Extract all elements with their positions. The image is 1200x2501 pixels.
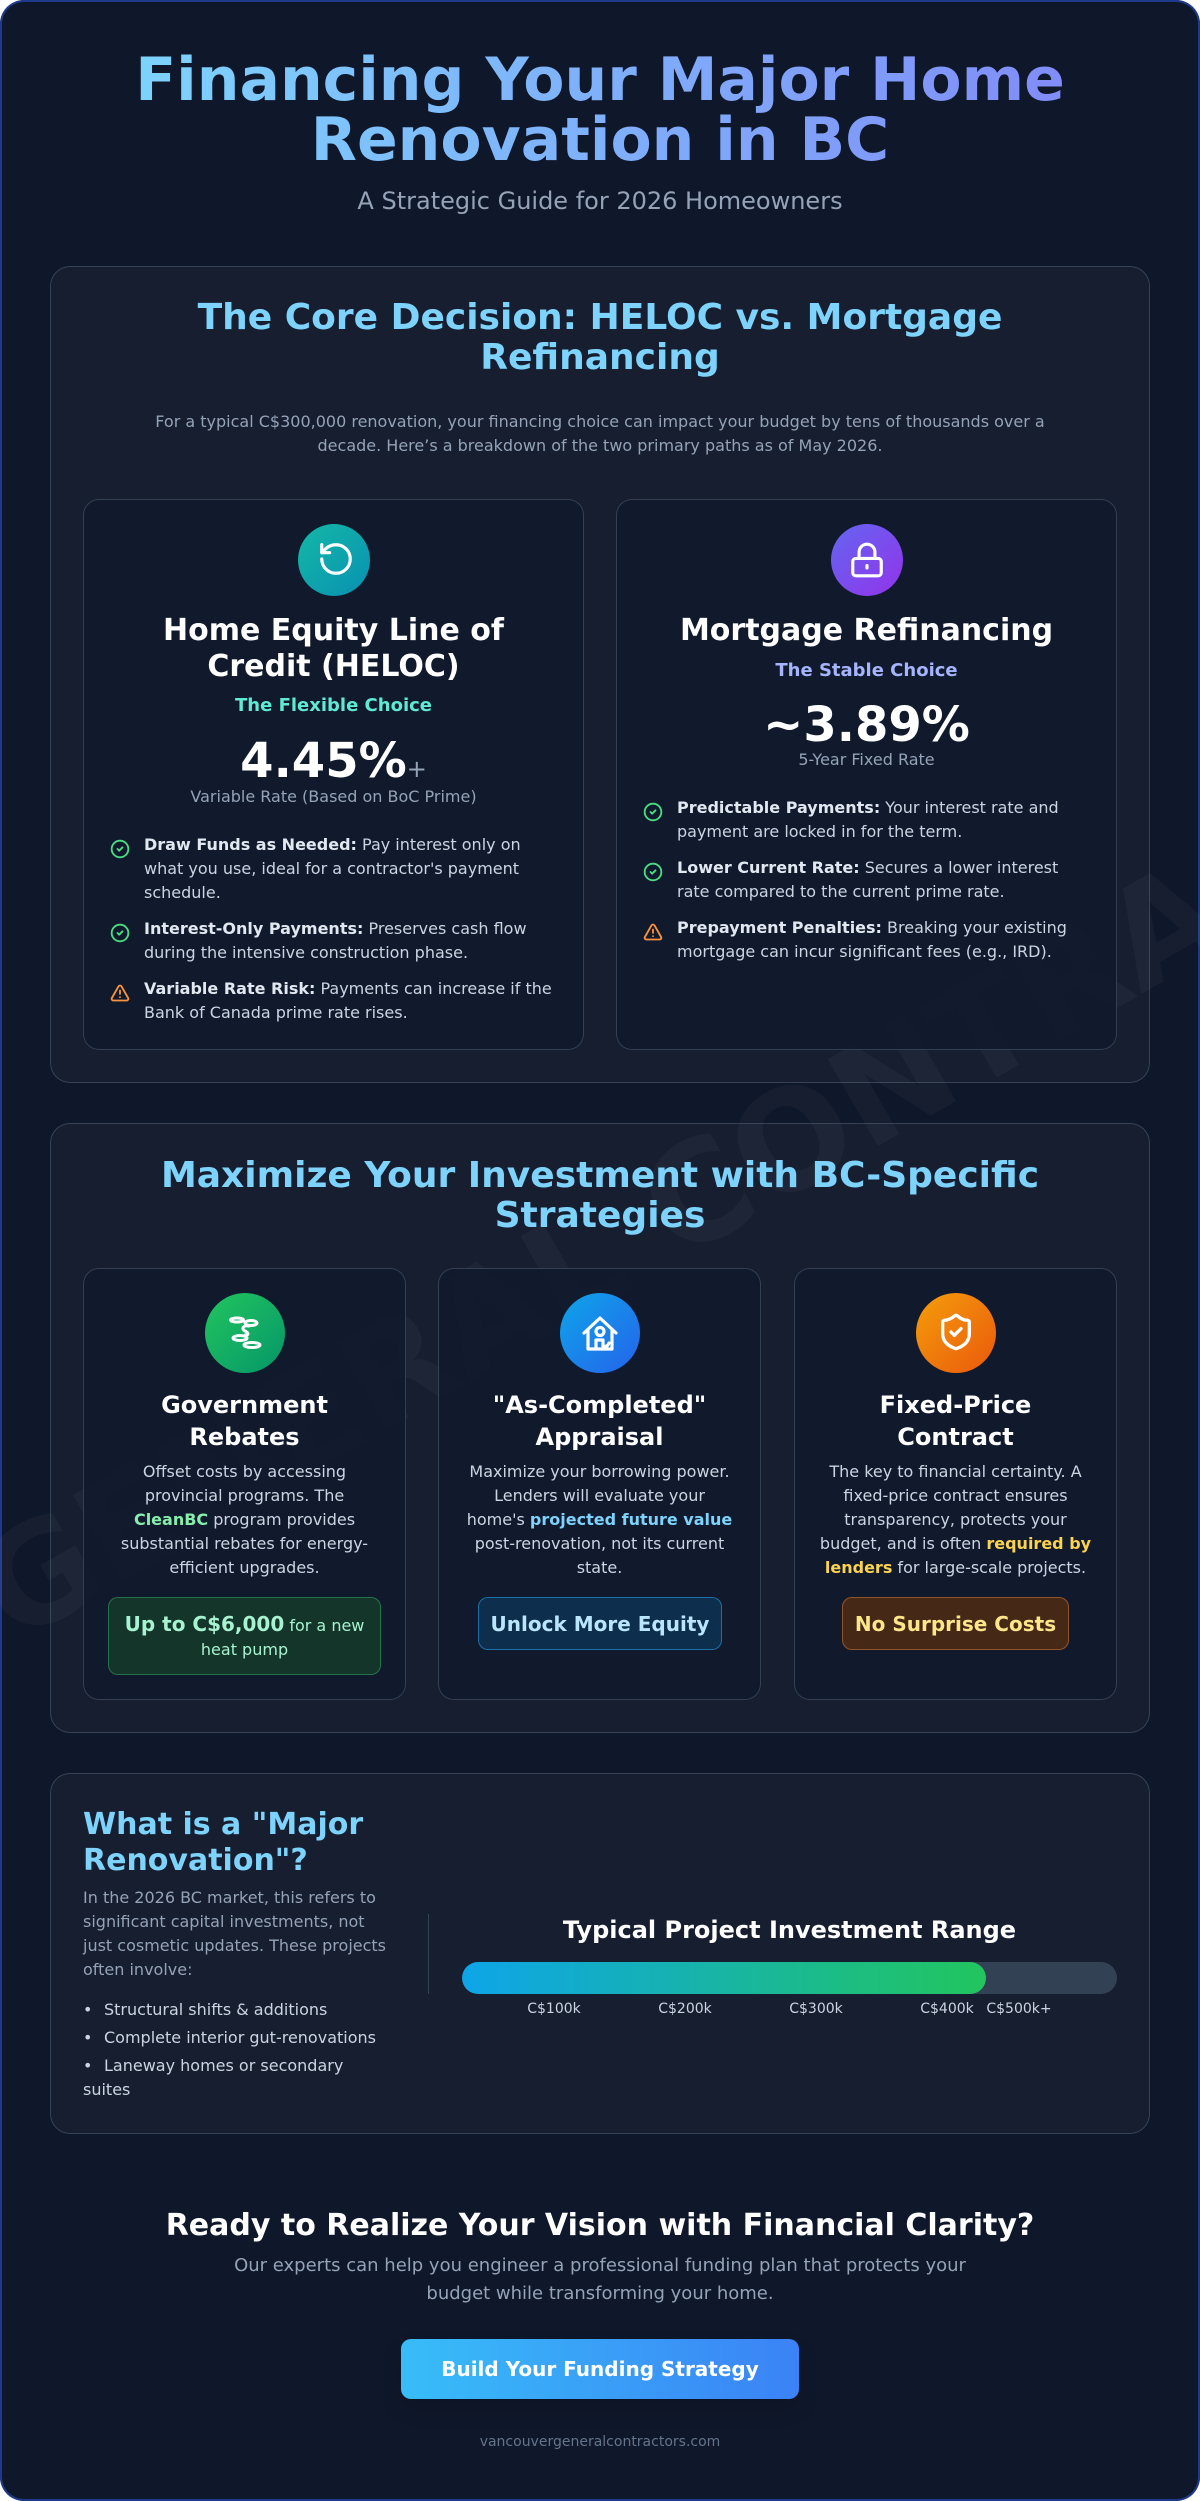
item: variable risk — [110, 979, 552, 1022]
callout: heat pump — [201, 1640, 288, 1659]
card text: Offset costs by accessing — [143, 1462, 346, 1481]
chart: investment range: C$500k+ — [986, 2001, 1052, 2017]
card text — [121, 1462, 368, 1577]
item: prepayment — [644, 918, 1067, 961]
card: fixed price — [794, 1268, 1117, 1700]
item: draw funds — [110, 835, 521, 902]
chart title: Typical Project Investment Range — [563, 1916, 1016, 1944]
cta text: budget while transforming your home. — [426, 2283, 774, 2304]
rate label: Variable Rate (Based on BoC Prime) — [190, 787, 477, 806]
item: lower rate: Lower Current Rate: Secures a lower interest — [677, 858, 1058, 877]
card text: state. — [577, 1558, 622, 1577]
callout — [842, 1597, 1069, 1650]
item: draw funds: Draw Funds as Needed: Pay interest only on — [144, 835, 521, 854]
panel: major renovation — [50, 1773, 1150, 2134]
card: appraisal — [438, 1268, 761, 1700]
callout: No Surprise Costs — [855, 1612, 1056, 1636]
card text — [820, 1462, 1091, 1577]
chart: investment range: C$200k — [658, 2001, 712, 2017]
card title: Government — [161, 1391, 328, 1419]
item: interest only: Interest-Only Payments: Preserves cash flow — [144, 919, 527, 938]
title — [130, 50, 1070, 170]
project list: Laneway homes or secondary — [104, 2056, 343, 2075]
range bar — [462, 1962, 1117, 1994]
card title: Mortgage Refinancing — [680, 613, 1053, 648]
chart: investment range: C$400k — [920, 2001, 974, 2017]
title: Renovation in BC — [311, 105, 889, 175]
item: draw funds: what you use, ideal for a contractor's payment — [144, 859, 519, 878]
card: HELOC — [83, 499, 584, 1050]
axis labels: C$100k — [527, 2001, 581, 2017]
card text: transparency, protects your — [844, 1510, 1067, 1529]
card text — [467, 1462, 732, 1577]
icon: lock — [830, 524, 902, 596]
card text: The key to financial certainty. A — [829, 1462, 1082, 1481]
tagline: The Flexible Choice — [235, 695, 432, 716]
tagline: The Stable Choice — [775, 660, 958, 681]
item: prepayment: mortgage can incur significant fees (e.g., IRD). — [677, 942, 1052, 961]
heading: core decision — [198, 297, 1002, 378]
card text: budget, and is often required by — [820, 1534, 1091, 1553]
card title: "As-Completed" — [493, 1391, 706, 1419]
rate: ~3.89% — [763, 697, 970, 753]
card title: Credit (HELOC) — [207, 649, 460, 684]
subtitle: A Strategic Guide for 2026 Homeowners — [357, 187, 843, 215]
footer url: vancouvergeneralcontractors.com — [480, 2434, 720, 2450]
project list: • — [83, 2028, 92, 2047]
item: predictable — [644, 798, 1059, 841]
item: interest only: during the intensive construction phase. — [144, 943, 468, 962]
project list: • — [83, 2056, 92, 2075]
project list: Structural shifts & additions — [104, 2000, 327, 2019]
project list: Complete interior gut-renovations — [104, 2028, 376, 2047]
cta button — [401, 2339, 799, 2399]
icon: rotate arrow — [298, 524, 370, 596]
panel: BC strategies — [50, 1123, 1150, 1733]
definition text: significant capital investments, not — [83, 1912, 365, 1931]
card text: provincial programs. The — [145, 1486, 344, 1505]
callout: Unlock More Equity — [491, 1612, 709, 1636]
card text: Maximize your borrowing power. — [469, 1462, 730, 1481]
intro text: decade. Here’s a breakdown of the two primary paths as of May 2026. — [318, 436, 882, 455]
card text: fixed-price contract ensures — [843, 1486, 1068, 1505]
card: mortgage — [616, 499, 1117, 1050]
cta button: Build Your Funding Strategy — [441, 2357, 759, 2381]
card title: Contract — [897, 1423, 1014, 1451]
chart: investment range — [462, 1916, 1117, 2017]
item: prepayment: Prepayment Penalties: Breaking your existing — [677, 918, 1067, 937]
cta text — [234, 2255, 966, 2304]
card title: Fixed-Price — [880, 1391, 1031, 1419]
heading: strategies: Maximize Your Investment with BC-Specific — [161, 1155, 1039, 1196]
item: interest only — [110, 919, 527, 962]
callout: Up to C$6,000 for a new — [125, 1612, 364, 1636]
card title: Home Equity Line of — [163, 613, 504, 648]
project list — [83, 2000, 376, 2099]
item: draw funds: schedule. — [144, 883, 221, 902]
intro text: For a typical C$300,000 renovation, your financing choice can impact your budget by tens of thousands over a — [155, 412, 1045, 431]
heading: core decision: Refinancing — [480, 337, 720, 378]
item: variable risk: Bank of Canada prime rate rises. — [144, 1003, 408, 1022]
card text: CleanBC program provides — [134, 1510, 355, 1529]
card text: efficient upgrades. — [169, 1558, 320, 1577]
heading: major renovation — [83, 1807, 364, 1878]
card title: Rebates — [189, 1423, 300, 1451]
callout — [108, 1597, 381, 1675]
card text: lenders for large-scale projects. — [825, 1558, 1086, 1577]
card title — [163, 613, 504, 684]
heading: core decision: The Core Decision: HELOC vs. Mortgage — [198, 297, 1002, 338]
cta heading: Ready to Realize Your Vision with Financial Clarity? — [166, 2208, 1034, 2243]
definition text — [82, 1888, 386, 1979]
item: predictable: payment are locked in for the term. — [677, 822, 962, 841]
rate label: 5-Year Fixed Rate — [798, 750, 935, 769]
card title — [493, 1391, 706, 1451]
heading: major renovation: What is a "Major — [83, 1807, 363, 1842]
heading: major renovation: Renovation"? — [83, 1843, 308, 1878]
callout — [478, 1597, 722, 1650]
card text: home's projected future value — [467, 1510, 732, 1529]
definition text: In the 2026 BC market, this refers to — [83, 1888, 376, 1907]
intro text — [155, 412, 1045, 455]
rate: 4.45%+ — [240, 733, 427, 789]
cta text: Our experts can help you engineer a professional funding plan that protects your — [234, 2255, 966, 2276]
icon: coins — [204, 1293, 284, 1373]
card title — [880, 1391, 1031, 1451]
icon: shield — [916, 1293, 996, 1373]
card text: Lenders will evaluate your — [494, 1486, 705, 1505]
item: lower rate — [644, 858, 1058, 901]
definition text: just cosmetic updates. These projects — [83, 1936, 386, 1955]
card text: post-renovation, not its current — [475, 1534, 724, 1553]
heading: strategies — [161, 1155, 1039, 1236]
card title: Appraisal — [536, 1423, 663, 1451]
card: rebates — [83, 1268, 406, 1700]
heading: strategies: Strategies — [495, 1195, 705, 1236]
title: Financing Your Major Home — [135, 45, 1065, 115]
chart: investment range: C$300k — [789, 2001, 843, 2017]
card title — [161, 1391, 328, 1451]
item: lower rate: rate compared to the current prime rate. — [677, 882, 1005, 901]
card text: substantial rebates for energy- — [121, 1534, 368, 1553]
project list: • — [83, 2000, 92, 2019]
item: variable risk: Variable Rate Risk: Payments can increase if the — [144, 979, 552, 998]
definition text: often involve: — [83, 1960, 192, 1979]
item: predictable: Predictable Payments: Your interest rate and — [677, 798, 1059, 817]
panel: core decision — [50, 266, 1150, 1083]
icon: house — [560, 1293, 640, 1373]
project list: suites — [83, 2080, 130, 2099]
